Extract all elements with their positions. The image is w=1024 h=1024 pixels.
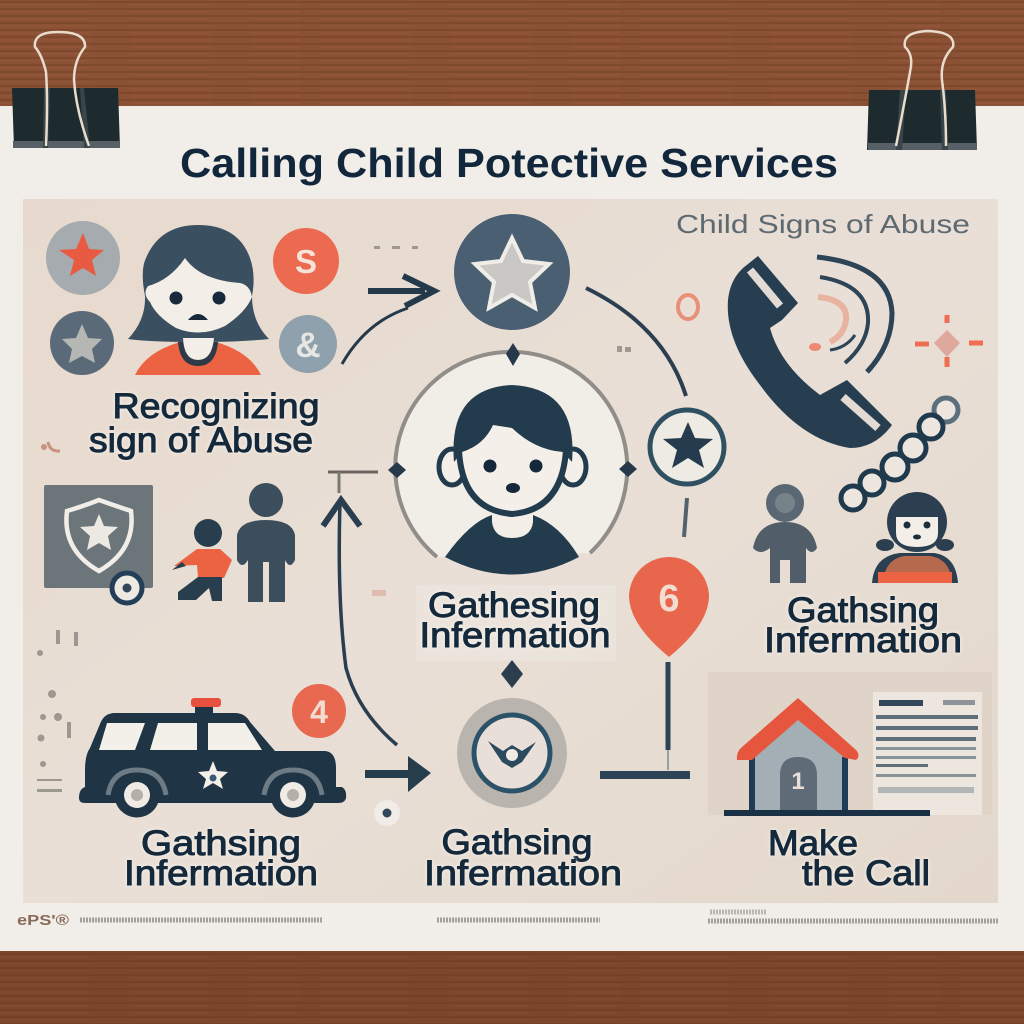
heading: gathering information middle: Infermation xyxy=(424,854,622,893)
heading: make the call: Make xyxy=(768,824,858,863)
icon: girl face xyxy=(128,225,269,375)
heading: recognizing sign of abuse xyxy=(89,387,320,460)
inner beige panel xyxy=(23,199,998,903)
heading: gathering information middle xyxy=(424,823,622,893)
footer fine print: ePS'® xyxy=(17,912,69,929)
arc arrow to right star xyxy=(586,288,686,396)
subtitle: child signs of abuse: Child Signs of Abuse xyxy=(676,209,970,239)
line from pin down xyxy=(600,662,690,775)
icon: child with hood xyxy=(872,492,958,583)
arrow: long upward xyxy=(323,500,397,745)
heading: recognizing sign of abuse: Recognizing xyxy=(112,387,320,426)
heading: gathering information car: Infermation xyxy=(124,854,318,893)
location pin with 6: 6 xyxy=(658,578,680,620)
icon: outlined star badge xyxy=(650,410,724,484)
icon: red star badge xyxy=(46,221,120,295)
icon: red S badge: S xyxy=(295,243,317,280)
icon: red number badge: 4 xyxy=(310,694,328,730)
heading: gathering information center xyxy=(416,585,616,661)
heading: gathering information center: Gathesing xyxy=(428,586,600,625)
icon: red number badge xyxy=(292,684,346,738)
icon: adult figure right xyxy=(753,484,817,583)
location pin with 6 xyxy=(629,557,709,657)
central circular ring with child xyxy=(395,352,627,574)
icon: top star badge xyxy=(454,214,570,330)
icon: telephone xyxy=(728,256,892,448)
heading: gathering information car: Gathsing xyxy=(141,824,301,863)
faded side specks xyxy=(37,246,631,792)
heading: gathering information center: Infermation xyxy=(420,616,610,655)
short line under star badge xyxy=(684,498,687,537)
icon: house xyxy=(724,698,930,813)
elbow connector to ring xyxy=(328,472,378,493)
icon: adult and child xyxy=(172,483,295,602)
binder clip left xyxy=(12,32,120,148)
heading: gathering information right xyxy=(764,591,962,660)
arrow: car to target xyxy=(365,756,431,792)
icon: grey symbol badge: & xyxy=(295,326,321,365)
small ring dot xyxy=(374,800,400,826)
icon: target dial xyxy=(457,698,567,808)
heading: gathering information right: Gathsing xyxy=(787,591,939,630)
icon: house: 1 xyxy=(791,768,805,795)
icon: document lines xyxy=(873,692,982,815)
heading: gathering information middle: Gathsing xyxy=(442,823,592,862)
icon: dark star badge xyxy=(50,311,114,375)
icon: shield badge xyxy=(44,485,153,603)
binder clip right xyxy=(867,31,977,150)
arrow: curved to top star xyxy=(342,276,434,364)
heading: recognizing sign of abuse: sign of Abuse xyxy=(89,421,313,460)
heading: gathering information car xyxy=(124,824,318,893)
icon: chain links xyxy=(841,398,958,510)
icon: grey symbol badge xyxy=(279,315,337,373)
icon: red crosshair spark xyxy=(915,315,983,367)
icon: red S badge xyxy=(273,228,339,294)
heading: make the call: the Call xyxy=(802,854,930,893)
heading: make the call xyxy=(768,824,930,893)
title: Calling Child Potective Services xyxy=(180,140,838,186)
small faded red marker xyxy=(678,295,698,319)
heading: gathering information right: Infermation xyxy=(764,621,962,660)
ring diamond nodes xyxy=(388,343,637,478)
diamond below heading xyxy=(501,660,523,688)
icon: police car xyxy=(79,698,346,818)
lower right darker panel xyxy=(708,672,992,815)
